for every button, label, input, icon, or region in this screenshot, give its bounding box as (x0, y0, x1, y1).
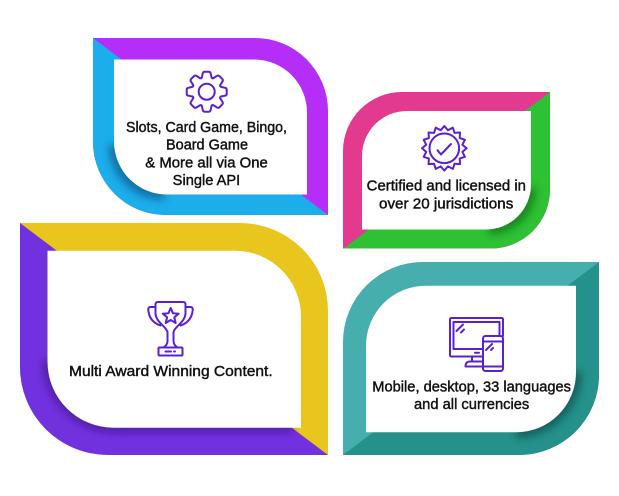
text: game types (126, 120, 287, 189)
panel frame: teal (343, 262, 599, 455)
text: game types: Single API (173, 173, 240, 189)
panel: certification (343, 92, 550, 249)
panel frame: purple and blue (93, 38, 328, 215)
icon: trophy (148, 302, 193, 356)
text: certification (367, 178, 526, 212)
content card (366, 286, 576, 432)
content card (48, 251, 301, 428)
text: awards: Multi Award Winning Content. (69, 364, 273, 380)
text: certification: over 20 jurisdictions (379, 196, 513, 212)
content card (362, 111, 531, 230)
text: game types: Board Game (166, 138, 248, 154)
text: game types: & More all via One (145, 156, 268, 172)
text: devices: Mobile, desktop, 33 languages (372, 380, 571, 396)
panel: awards (20, 223, 328, 455)
content card (114, 60, 307, 194)
panel: devices (343, 262, 599, 455)
panel frame: pink and green (343, 92, 550, 249)
icon: monitor and phone (450, 318, 503, 371)
panel frame: yellow and violet (20, 223, 328, 455)
text: devices (372, 380, 571, 413)
icon: certified badge (422, 126, 467, 171)
text: game types: Slots, Card Game, Bingo, (126, 120, 287, 136)
icon: gear (187, 72, 227, 112)
text: certification: Certified and licensed in (367, 178, 526, 194)
panel: game types (93, 38, 328, 215)
text: devices: and all currencies (414, 397, 529, 413)
